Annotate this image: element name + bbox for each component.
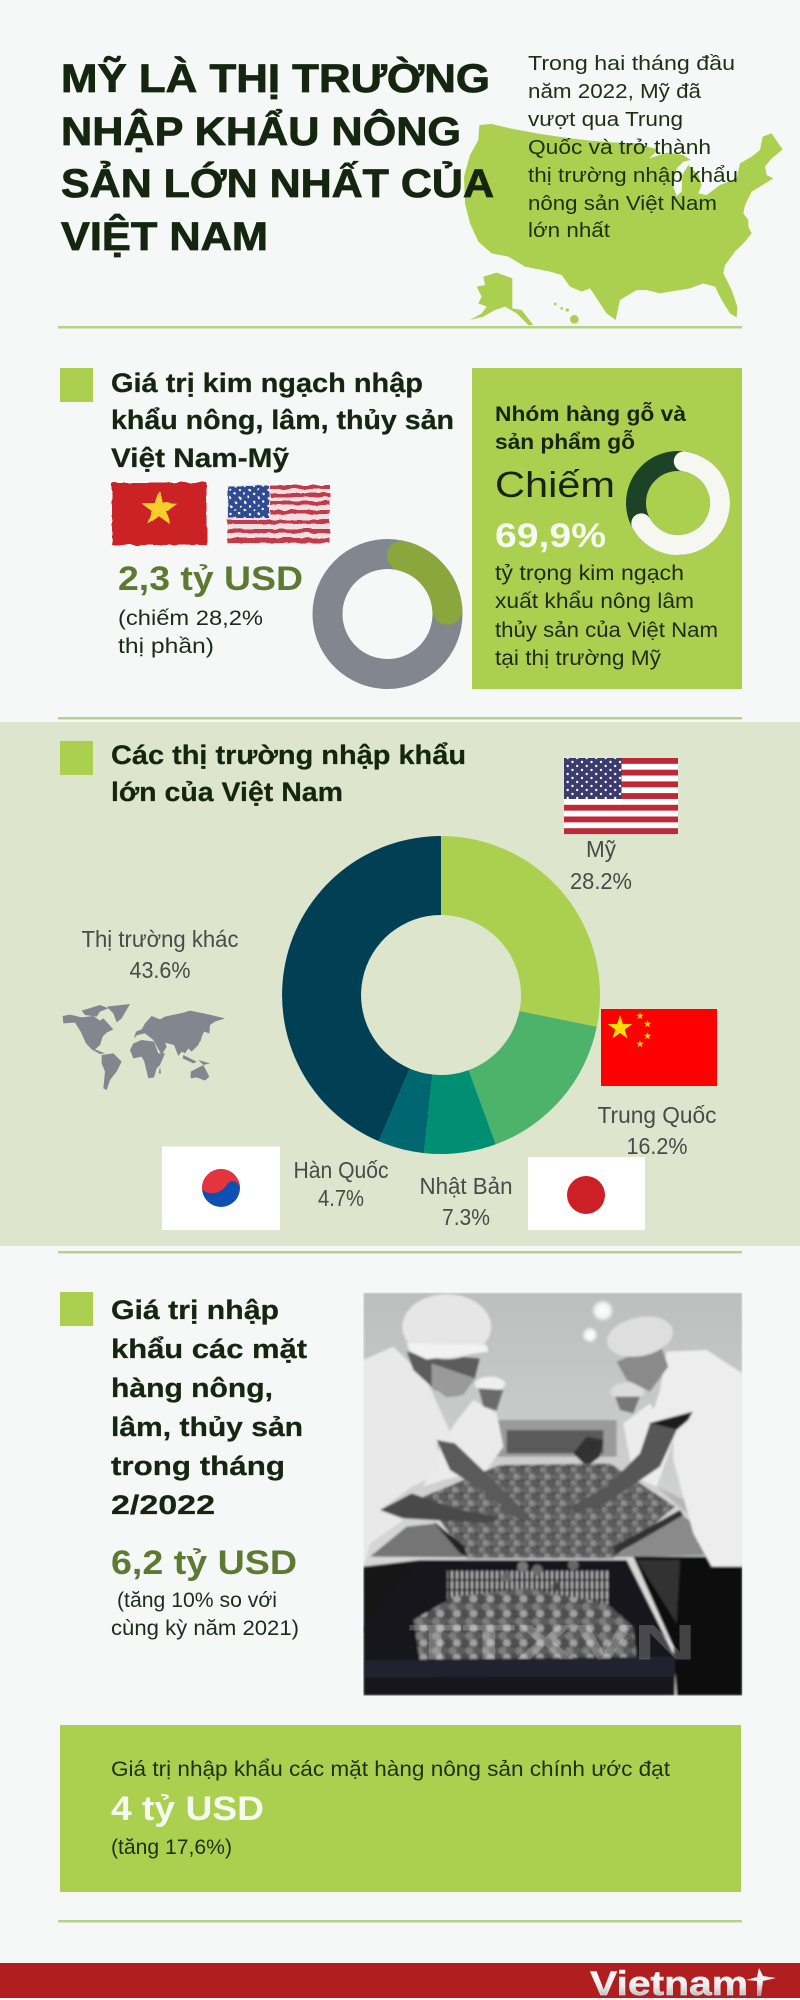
heading: trade value: khẩu nông, lâm, thủy sản: [111, 405, 454, 435]
label: USA: Mỹ: [586, 836, 616, 862]
heading: wood products: sản phẩm gỗ: [495, 430, 635, 454]
text: market share note: [118, 607, 263, 658]
text: wood products description: xuất khẩu nông lâm: [495, 590, 694, 613]
figure: 2.3 billion USD: 2,3 tỷ USD: [118, 560, 303, 598]
icon: Vietnam flag: [112, 483, 207, 545]
label: other markets: Thị trường khác: [82, 926, 238, 952]
title: MỸ LÀ THỊ TRƯỜNG: [61, 55, 490, 101]
icon: section marker: [60, 741, 93, 775]
footer bar with logo: [0, 1963, 800, 2000]
title: [61, 55, 494, 259]
text: main products description: Giá trị nhập khẩu các mặt hàng nông sản chính ước đạt: [111, 1758, 670, 1781]
label: other markets: [82, 926, 238, 983]
figure: 4 billion USD: 4 tỷ USD: [111, 1790, 264, 1828]
heading: February imports: lâm, thủy sản: [111, 1412, 303, 1442]
text: wood products description: tại thị trường Mỹ: [495, 647, 662, 670]
intro text: thị trường nhập khẩu: [528, 165, 738, 187]
label: USA: [570, 836, 632, 894]
label: Japan: Nhật Bản: [420, 1173, 512, 1199]
heading: wood products: Nhóm hàng gỗ và: [495, 402, 686, 426]
heading: February imports: hàng nông,: [111, 1373, 273, 1403]
label: China: [598, 1102, 716, 1159]
text: market share note: thị phần): [118, 635, 214, 658]
intro text: lớn nhất: [528, 220, 610, 242]
heading: trade value: Việt Nam-Mỹ: [111, 443, 289, 473]
heading: February imports: [111, 1295, 307, 1520]
donut chart: market shares: [282, 836, 600, 1154]
donut chart: 69.9% share: [636, 461, 720, 545]
icon: section marker: [60, 368, 93, 402]
intro text: nông sản Việt Nam: [528, 193, 717, 215]
text: growth note: cùng kỳ năm 2021): [111, 1617, 299, 1640]
heading: February imports: 2/2022: [111, 1490, 215, 1520]
heading: trade value: Giá trị kim ngạch nhập: [111, 368, 423, 398]
label: South Korea: [294, 1157, 388, 1211]
donut chart: 28.2% share: [328, 554, 448, 674]
intro text: vượt qua Trung: [528, 109, 683, 131]
title: NHẬP KHẨU NÔNG: [61, 107, 461, 154]
text: wood products description: [495, 562, 718, 670]
text: market share note: (chiếm 28,2%: [118, 607, 263, 630]
panel: major import markets: [0, 722, 800, 1246]
figure: 6.2 billion USD: 6,2 tỷ USD: [111, 1544, 297, 1582]
icon: China flag: [601, 1009, 717, 1086]
label: China: 16.2%: [626, 1133, 688, 1159]
intro text: Quốc và trở thành: [528, 137, 711, 159]
heading: markets: lớn của Việt Nam: [111, 777, 343, 807]
heading: markets: Các thị trường nhập khẩu: [111, 740, 466, 770]
label: South Korea: 4.7%: [318, 1185, 364, 1211]
photo: workers sorting fruit: [363, 1293, 742, 1696]
text: growth 17.6%: (tăng 17,6%): [111, 1836, 232, 1859]
icon: Korea flag: [162, 1146, 280, 1230]
icon: US flag brushed: [227, 485, 330, 544]
icon: Japan flag: [528, 1157, 645, 1230]
heading: February imports: khẩu các mặt: [111, 1334, 307, 1364]
icon: US flag: [564, 758, 678, 834]
label: USA: 28.2%: [570, 868, 632, 894]
label: China: Trung Quốc: [598, 1102, 716, 1128]
intro text: [528, 53, 738, 242]
icon: section marker: [60, 1292, 93, 1326]
heading: wood products: [495, 402, 686, 454]
map: United States: [464, 124, 783, 325]
intro text: năm 2022, Mỹ đã: [528, 81, 702, 103]
heading: trade value: [111, 368, 454, 473]
intro text: Trong hai tháng đầu: [528, 53, 735, 75]
text: wood products description: tỷ trọng kim ngạch: [495, 562, 684, 585]
icon: world map: [63, 1004, 225, 1090]
panel: February 2022 import value: [60, 1292, 742, 1696]
figure: 69.9%: 69,9%: [495, 517, 606, 555]
heading: February imports: trong tháng: [111, 1451, 285, 1481]
label: other markets: 43.6%: [130, 957, 190, 983]
text: wood products description: thủy sản của Việt Nam: [495, 619, 718, 642]
text: Chiếm: Chiếm: [495, 464, 615, 505]
heading: February imports: Giá trị nhập: [111, 1295, 279, 1325]
heading: markets: [111, 740, 466, 807]
panel: main agricultural imports: [60, 1725, 741, 1892]
label: South Korea: Hàn Quốc: [294, 1157, 388, 1183]
panel: Vietnam-US trade value: [60, 368, 454, 674]
photo: workers sorting fruit: TTXVN: [408, 1614, 697, 1670]
title: SẢN LỚN NHẤT CỦA: [61, 160, 494, 206]
label: Japan: 7.3%: [442, 1204, 490, 1230]
label: Japan: [420, 1173, 512, 1230]
text: growth note: (tăng 10% so với: [117, 1589, 277, 1612]
panel: wood products: [472, 368, 742, 689]
text: growth note: [111, 1589, 299, 1640]
title: VIỆT NAM: [61, 213, 268, 259]
